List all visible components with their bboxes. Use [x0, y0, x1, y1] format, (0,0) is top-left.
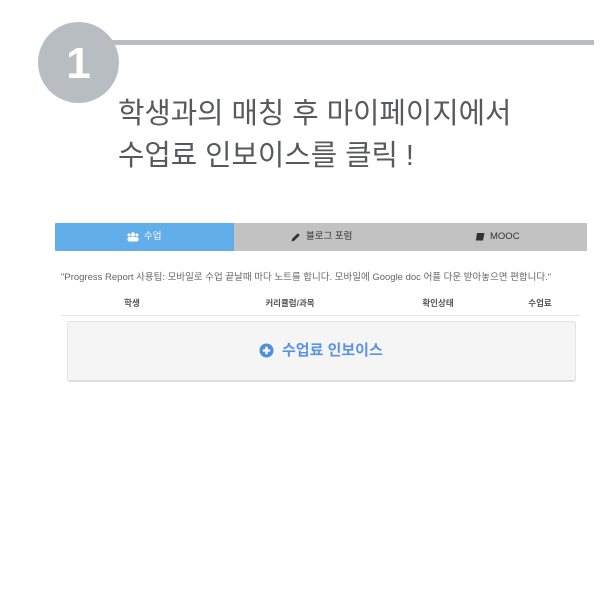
invoice label: 수업료 인보이스: [282, 342, 383, 359]
tab: 블로그 포럼: [292, 230, 352, 242]
icon: book: [476, 233, 484, 240]
tab label: MOOC: [490, 231, 520, 242]
active tab: 수업: [55, 223, 234, 251]
table header: 확인상태: 확인상태: [422, 298, 454, 308]
step number badge: [38, 22, 119, 103]
heading: 학생과의 매칭 후 마이페이지에서: [118, 98, 511, 130]
table divider: [61, 315, 580, 316]
tip text: "Progress Report 사용팁: 모바일로 수업 끝날때 마다 노트를 합니다. 모바일에 Google doc 어플 다운 받아놓으면 편합니다.": [61, 272, 551, 283]
heading: 수업료 인보이스를 클릭 !: [118, 140, 414, 172]
header rule: [110, 40, 594, 44]
tab label: 블로그 포럼: [306, 231, 352, 242]
navigation tabs: [55, 223, 587, 251]
table header: 학생: 학생: [124, 298, 140, 308]
tab label: 수업: [144, 231, 161, 242]
icon: users: [128, 232, 138, 242]
table header: 커리큘럼/과목: 커리큘럼/과목: [265, 298, 315, 308]
icon: plus circle: [260, 344, 274, 358]
invoice panel: [67, 321, 576, 382]
tab: MOOC: [476, 231, 520, 242]
table header: 수업료: 수업료: [528, 298, 552, 308]
icon: pencil: [292, 233, 300, 242]
step number badge: 1: [66, 39, 91, 88]
heading: [118, 98, 511, 172]
